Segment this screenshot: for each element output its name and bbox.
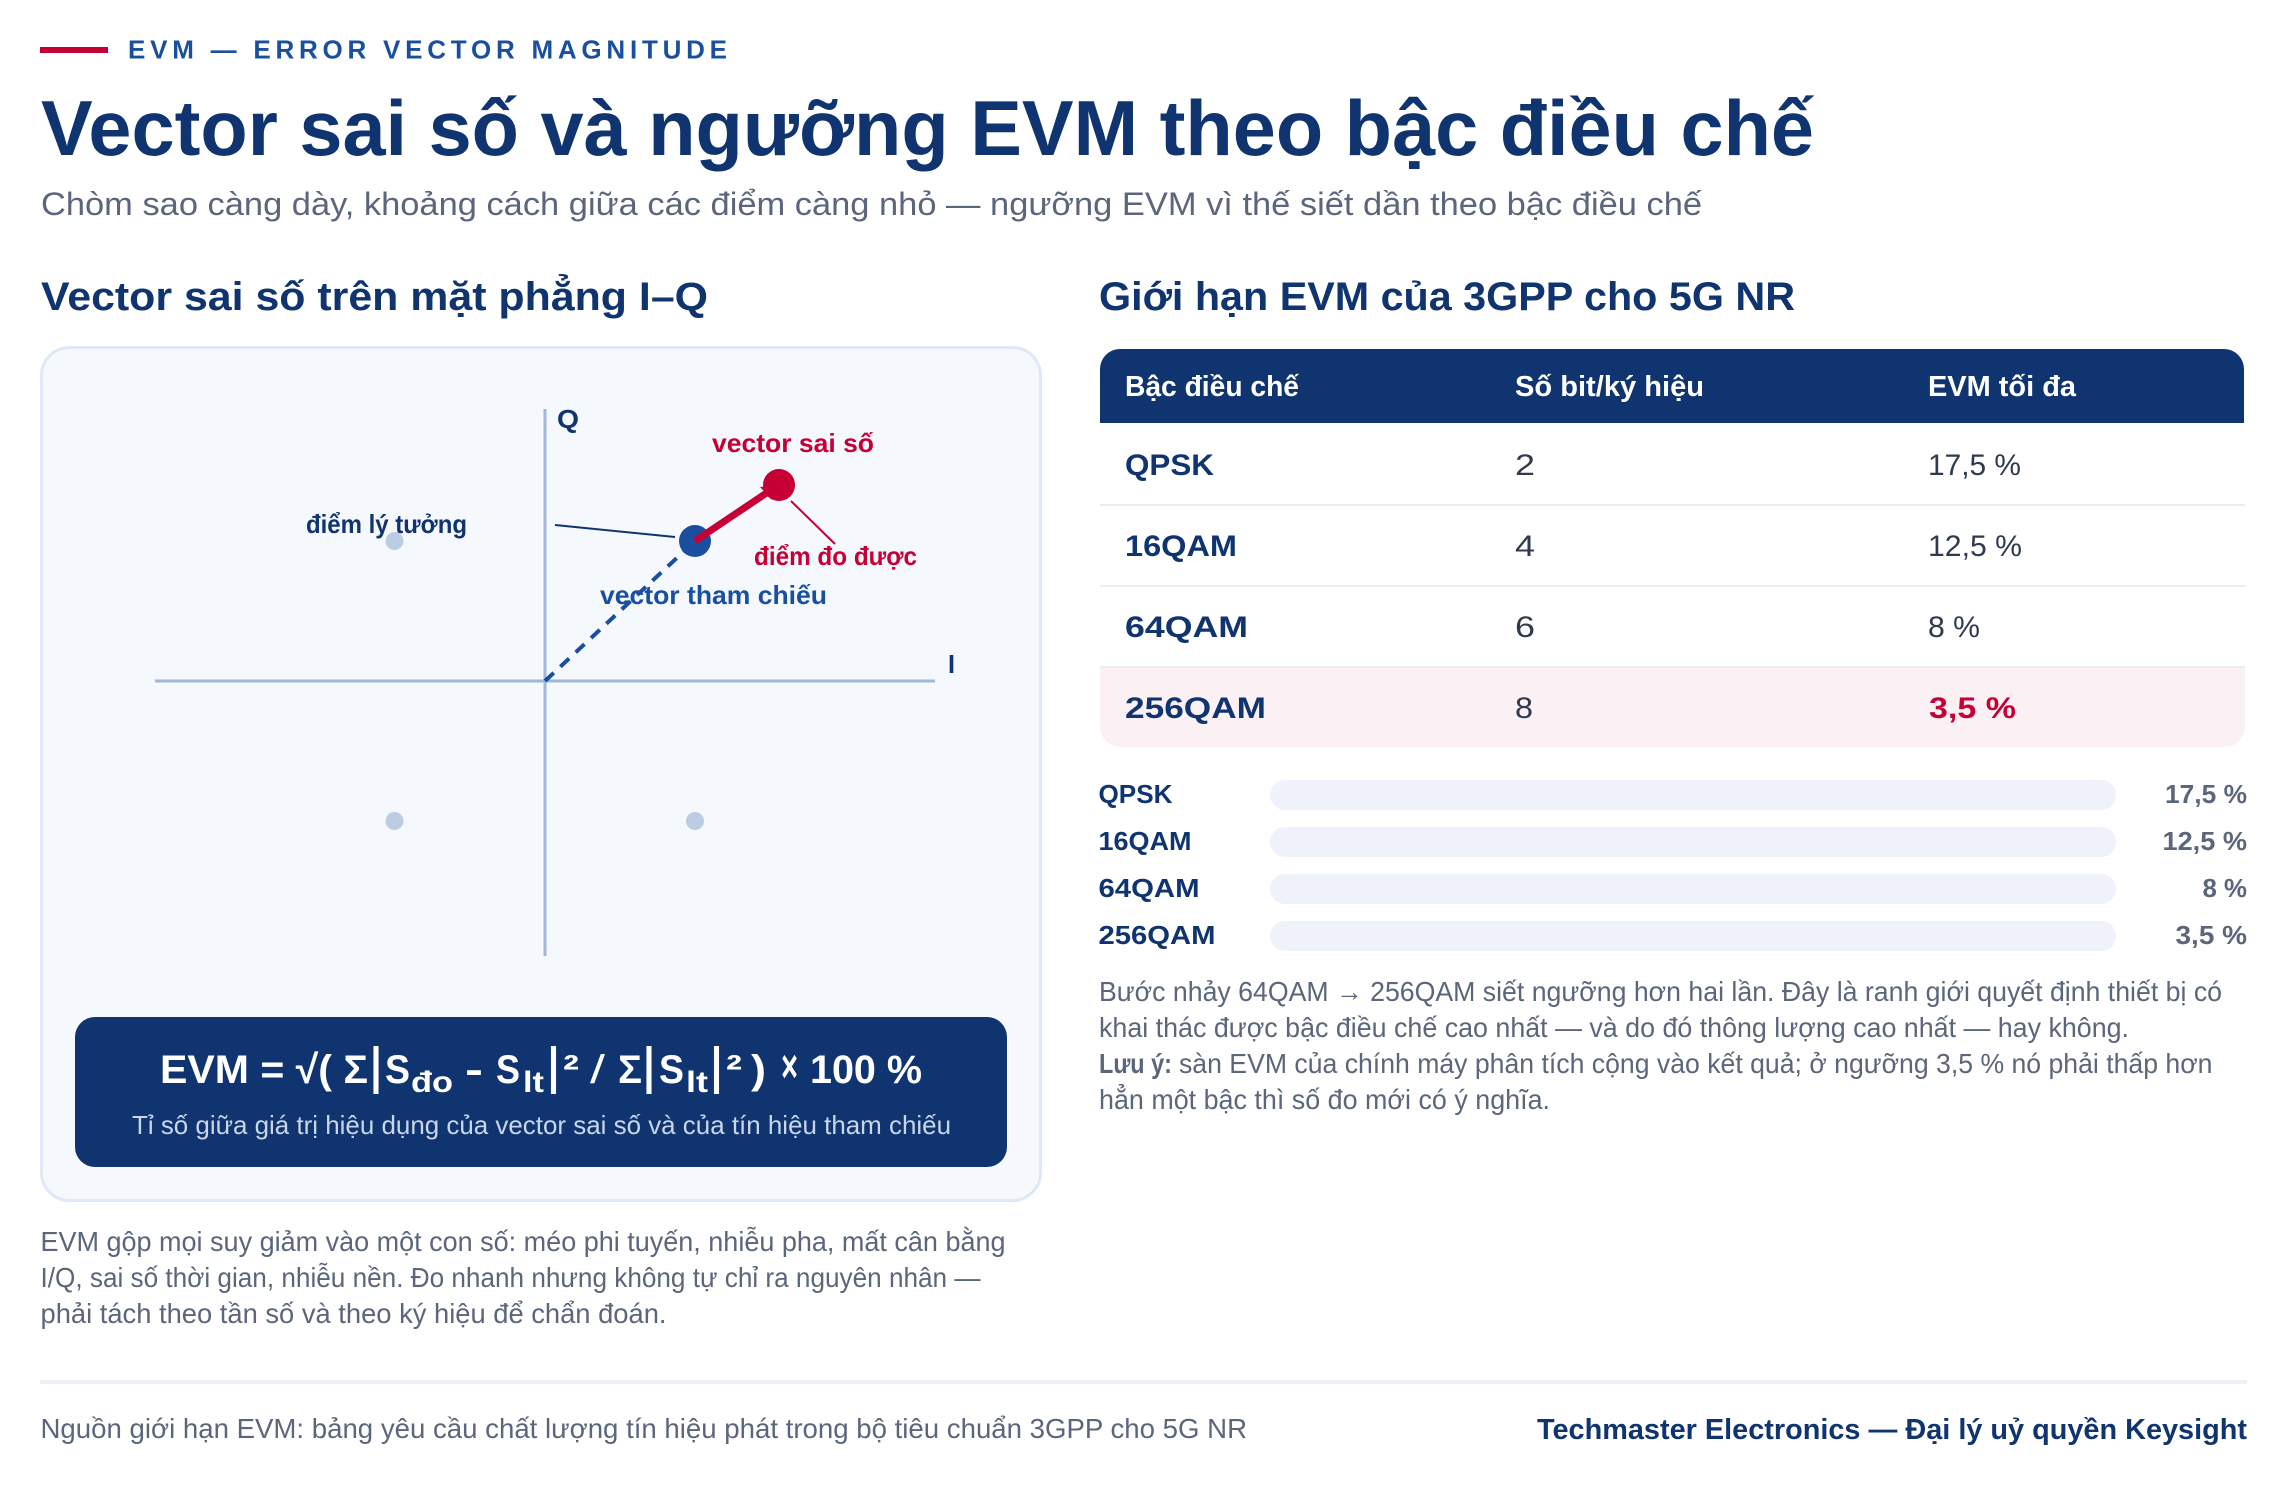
measured point marker: [763, 469, 795, 501]
row: QPSK: QPSK: [1125, 449, 1214, 482]
card background: [42, 348, 1040, 1200]
formula caption: Tỉ số giữa giá trị hiệu dụng của vector sai số và của tín hiệu tham chiếu: [132, 1110, 951, 1140]
eyebrow label: EVM — ERROR VECTOR MAGNITUDE: [128, 34, 727, 64]
bar: 256QAM: 3,5 %: [2176, 920, 2247, 950]
formula expression: S: [496, 1048, 520, 1092]
formula expression: ): [751, 1048, 766, 1092]
Q axis: [544, 409, 546, 956]
bar: 16QAM: 16QAM: [1098, 826, 1192, 856]
label: ideal point: điểm lý tưởng: [306, 509, 467, 539]
formula expression: /: [590, 1048, 606, 1092]
footer source note: Nguồn giới hạn EVM: bảng yêu cầu chất lượng tín hiệu phát trong bộ tiêu chuẩn 3GPP cho 5G NR: [40, 1413, 1247, 1444]
formula expression: ²: [726, 1048, 742, 1092]
formula expression: 100 %: [810, 1048, 922, 1092]
right explanatory text: khai thác được bậc điều chế cao nhất — và do đó thông lượng cao nhất — hay không.: [1099, 1012, 2129, 1043]
bar: QPSK: QPSK: [1098, 779, 1173, 809]
formula expression: ×: [781, 1040, 798, 1092]
formula expression: |: [547, 1038, 560, 1094]
bar: 16QAM: [1098, 826, 2247, 857]
formula expression: lt: [686, 1066, 708, 1099]
formula expression: ²: [563, 1048, 579, 1092]
I axis: [155, 680, 935, 682]
label: reference vector: vector tham chiếu: [600, 580, 827, 610]
bar: 256QAM: 256QAM: [1098, 920, 1216, 950]
label: error vector: vector sai số: [712, 428, 874, 458]
right explanatory text: Lưu ý:: [1099, 1048, 1172, 1079]
formula expression: EVM = √( Σ: [160, 1048, 368, 1092]
right explanatory text: Bước nhảy 64QAM → 256QAM siết ngưỡng hơn hai lần. Đây là ranh giới quyết định thiết bị có: [1099, 976, 2222, 1007]
row: 256QAM highlighted: 3,5 %: [1929, 692, 2016, 725]
row: 16QAM: 12,5 %: [1928, 530, 2022, 563]
left explanatory text: EVM gộp mọi suy giảm vào một con số: méo phi tuyến, nhiễu pha, mất cân bằng: [40, 1226, 1006, 1257]
right explanatory text: [1099, 976, 2222, 1115]
row: 256QAM highlighted: 8: [1515, 692, 1533, 725]
leader line to measured point: [791, 501, 835, 544]
bar: QPSK: 17,5 %: [2165, 779, 2247, 809]
bar list: EVM comparison: [1098, 779, 2247, 951]
heading: 3GPP limits: Giới hạn EVM của 3GPP cho 5G NR: [1099, 275, 1795, 319]
formula box: [75, 1017, 1007, 1167]
label: measured point: điểm đo được: [754, 541, 917, 571]
row: 16QAM: [1100, 530, 2245, 586]
row: QPSK: 17,5 %: [1928, 449, 2021, 482]
formula expression: Σ: [618, 1048, 642, 1092]
formula expression: |: [370, 1038, 382, 1094]
heading: I-Q plane: Vector sai số trên mặt phẳng I–Q: [41, 272, 708, 319]
row: 16QAM: 4: [1515, 530, 1535, 563]
formula expression: |: [642, 1038, 656, 1094]
title: Vector sai số và ngưỡng EVM theo bậc điều chế: [41, 84, 1815, 172]
row: QPSK: 2: [1515, 449, 1535, 482]
bar: 256QAM: [1098, 920, 2247, 951]
panel: I-Q diagram card: [42, 348, 1040, 1200]
bar: 16QAM: 12,5 %: [2162, 826, 2247, 856]
reference vector (dashed): [545, 541, 695, 681]
leader line to ideal point: [555, 525, 675, 537]
row: 64QAM: 64QAM: [1125, 611, 1248, 644]
left explanatory text: [40, 1226, 1006, 1329]
formula expression: -: [465, 1048, 483, 1092]
table header: Số bit/ký hiệu: [1515, 371, 1704, 403]
formula expression: đo: [411, 1066, 453, 1099]
row: 64QAM: 8 %: [1928, 611, 1980, 644]
chart: I-Q constellation: [155, 404, 955, 956]
subtitle: Chòm sao càng dày, khoảng cách giữa các điểm càng nhỏ — ngưỡng EVM vì thế siết dần theo bậc điều chế: [41, 186, 1702, 222]
formula expression: |: [710, 1038, 723, 1094]
error vector arrow: [695, 486, 772, 541]
table header: [1100, 349, 2244, 423]
table: 3GPP EVM limits: [1100, 349, 2245, 747]
bar: QPSK: [1098, 779, 2247, 810]
bar: 64QAM: 8 %: [2202, 873, 2247, 903]
row: 64QAM: 6: [1515, 611, 1535, 644]
row: QPSK: [1100, 449, 2245, 505]
formula background: [75, 1017, 1007, 1167]
formula expression: [160, 1038, 922, 1099]
row: 256QAM highlighted: [1100, 668, 2245, 747]
bar: 64QAM: 64QAM: [1098, 873, 1200, 903]
formula expression: lt: [523, 1066, 544, 1099]
header: [40, 34, 1815, 222]
table header: Bậc điều chế: [1125, 371, 1300, 403]
axis label Q: Q: [557, 404, 579, 434]
formula expression: S: [385, 1048, 410, 1092]
ideal point marker: [679, 525, 711, 557]
ideal points: [386, 532, 704, 830]
accent bar: [40, 47, 108, 53]
row: 256QAM highlighted: 256QAM: [1125, 692, 1266, 725]
formula expression: S: [659, 1048, 684, 1092]
table header: EVM tối đa: [1928, 371, 2077, 403]
right explanatory text: sàn EVM của chính máy phân tích cộng vào kết quả; ở ngưỡng 3,5 % nó phải thấp hơn: [1179, 1048, 2212, 1079]
footer brand: Techmaster Electronics — Đại lý uỷ quyền Keysight: [1537, 1414, 2247, 1446]
axis label I: I: [948, 649, 955, 679]
row: 64QAM: [1100, 611, 2245, 667]
bar: 64QAM: [1098, 873, 2247, 904]
left explanatory text: phải tách theo tần số và theo ký hiệu để chẩn đoán.: [40, 1298, 666, 1329]
row: 16QAM: 16QAM: [1125, 530, 1237, 563]
left explanatory text: I/Q, sai số thời gian, nhiễu nền. Đo nhanh nhưng không tự chỉ ra nguyên nhân —: [40, 1262, 980, 1293]
right explanatory text: hẳn một bậc thì số đo mới có ý nghĩa.: [1099, 1083, 1550, 1115]
